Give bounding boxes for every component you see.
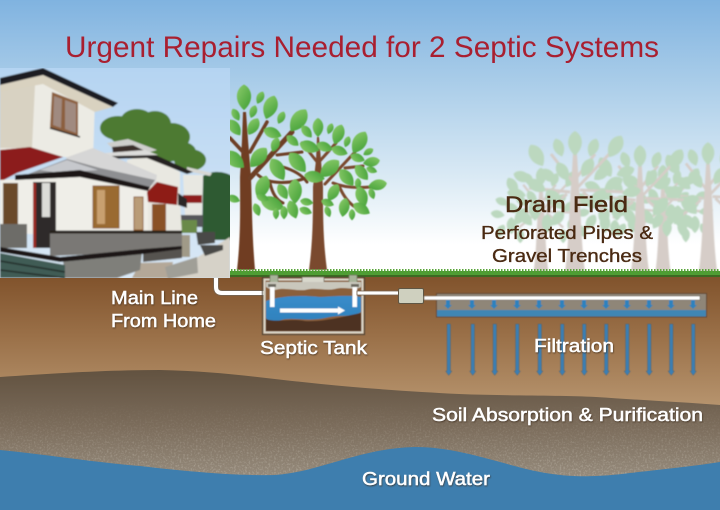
path <box>150 237 230 278</box>
drain field trench <box>424 294 706 317</box>
upper window <box>50 92 78 136</box>
label: filtration: Filtration <box>534 336 614 356</box>
black band <box>0 246 182 262</box>
steps <box>0 253 65 278</box>
soil speckle texture <box>0 416 720 476</box>
pipe drip marks <box>444 300 697 309</box>
tank riser caps <box>270 275 278 284</box>
label: main line from home: From Home <box>111 311 216 331</box>
back wing roofs <box>107 139 157 153</box>
foreground trees <box>221 84 388 270</box>
distribution box <box>398 288 424 304</box>
tank sludge <box>266 313 361 331</box>
tree leaves <box>221 84 388 220</box>
grey retaining wall <box>182 235 190 257</box>
windows and door <box>93 186 119 228</box>
concrete block <box>165 257 198 279</box>
label: main line from home: Main Line <box>111 288 198 308</box>
lower roof <box>65 148 157 186</box>
title: Urgent Repairs Needed for 2 Septic Systems <box>65 31 659 64</box>
upper storey wall <box>0 75 95 160</box>
inlet and outlet tees <box>270 285 274 307</box>
tank flow arrow <box>280 306 345 314</box>
gravel layer <box>266 282 361 290</box>
label: drain field: Gravel Trenches <box>492 246 642 266</box>
background trees in photo <box>100 109 206 171</box>
label: drain field <box>481 192 653 266</box>
brown subsoil layer <box>0 275 720 410</box>
outlet pipe <box>357 288 424 304</box>
main line pipe from home <box>216 275 264 293</box>
grass strip <box>225 270 720 277</box>
label: ground water: Ground Water <box>362 469 490 489</box>
tank shell <box>264 280 362 332</box>
label: drain field: Drain Field <box>505 192 628 217</box>
tank water <box>266 296 361 321</box>
tree branches and trunks <box>230 112 370 270</box>
label: septic tank: Septic Tank <box>260 338 368 358</box>
gravel ground <box>132 262 173 278</box>
upper roof <box>0 68 118 107</box>
stone base <box>50 232 182 256</box>
back wing wall <box>127 155 182 235</box>
label: main line from home <box>111 288 216 331</box>
sky background <box>0 0 720 278</box>
background faded trees <box>490 131 720 272</box>
red gable <box>147 182 178 205</box>
lower stone wall <box>143 247 182 262</box>
perforated pipe <box>424 296 700 300</box>
red band <box>0 147 63 182</box>
soil absorption layer <box>0 370 720 510</box>
filtration arrows <box>446 324 696 376</box>
house photo <box>0 68 230 278</box>
label: drain field: Perforated Pipes & <box>481 223 653 243</box>
label: soil absorption and purification: Soil Absorption & Purification <box>432 405 703 425</box>
septic tank <box>262 275 364 334</box>
ground water layer <box>0 447 720 510</box>
lower wall <box>0 176 148 236</box>
right wing wall <box>183 175 203 215</box>
